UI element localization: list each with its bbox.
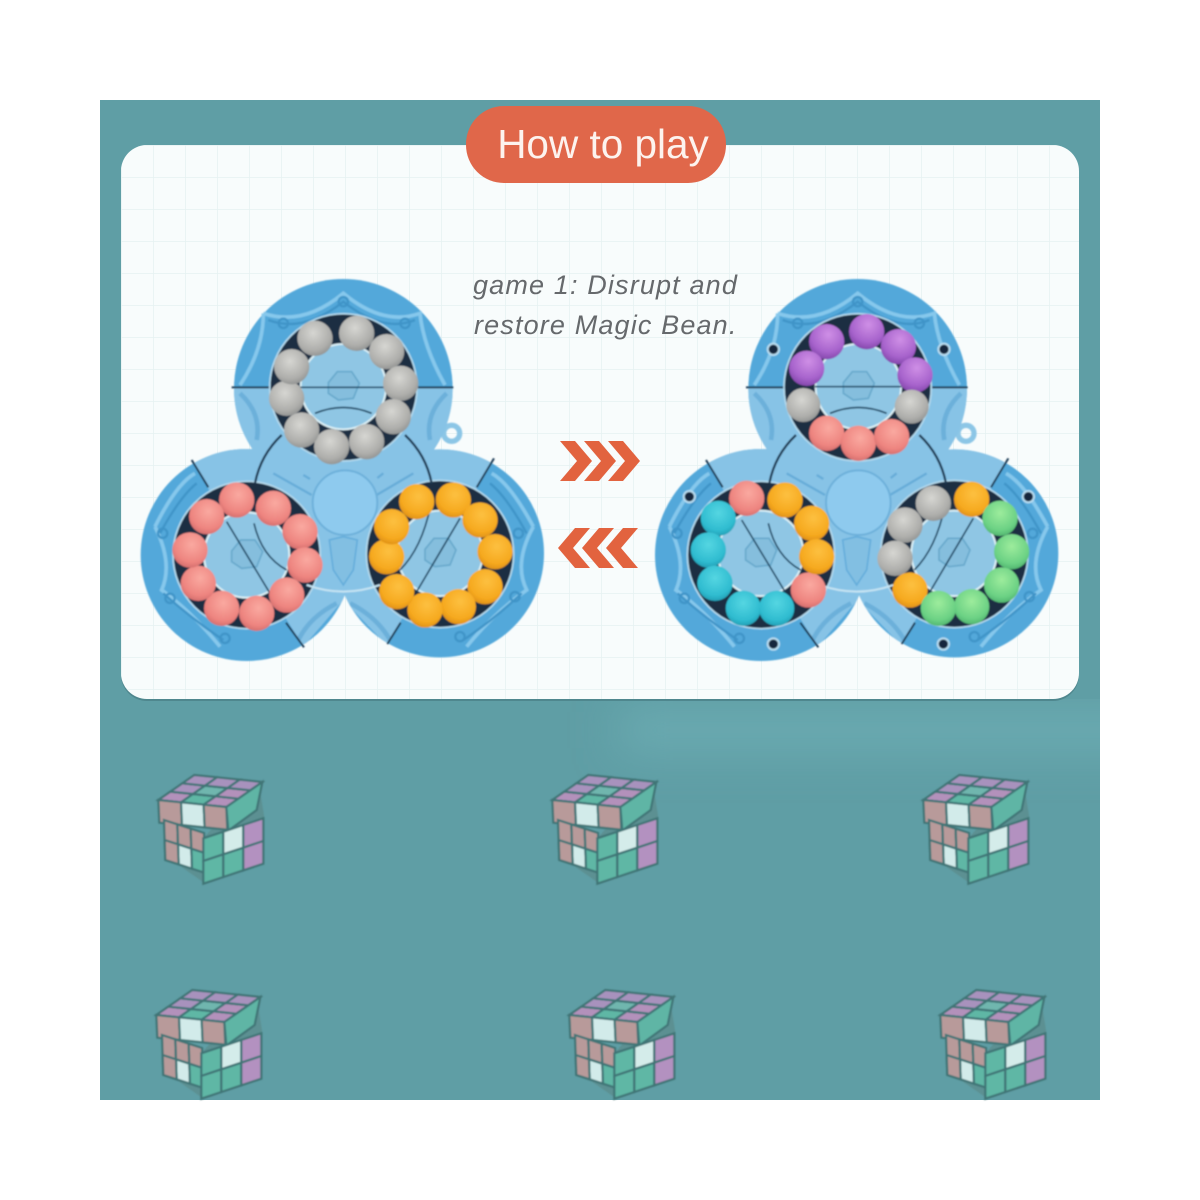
- left toy: sorted beads: [141, 279, 544, 661]
- arrows pointing left: [558, 528, 638, 568]
- how to play badge: [466, 106, 726, 183]
- left toy right disc: [397, 511, 483, 596]
- arrows pointing right: [560, 441, 640, 481]
- purple beads: [789, 314, 933, 393]
- game instruction text: restore Magic Bean.: [474, 310, 737, 340]
- cube top center: [552, 775, 658, 884]
- how to play badge: How to play: [497, 121, 710, 167]
- right toy left disc: [718, 511, 803, 596]
- left toy top disc: [301, 344, 386, 429]
- lighter band: [646, 720, 1100, 740]
- grey beads: [786, 388, 951, 576]
- cube top left: [158, 775, 264, 884]
- game instruction text: [473, 270, 738, 340]
- pink beads: [729, 416, 909, 608]
- white grid board: [121, 145, 1079, 701]
- orange beads: [767, 482, 989, 608]
- background panel: [100, 100, 1100, 1100]
- right toy: scrambled beads: [655, 279, 1058, 661]
- right toy top disc: [816, 344, 901, 429]
- cube bottom right: [940, 990, 1046, 1099]
- orange beads: [369, 482, 513, 628]
- left toy left disc: [204, 512, 289, 598]
- right toy seams: [742, 387, 973, 592]
- cyan beads: [691, 501, 794, 626]
- cube bottom left: [156, 990, 262, 1099]
- cube top right: [923, 775, 1029, 884]
- grey beads: [269, 316, 418, 464]
- game instruction text: game 1: Disrupt and: [473, 270, 738, 300]
- pink beads: [172, 482, 323, 631]
- screw holes: [684, 344, 1034, 650]
- green beads: [921, 501, 1029, 626]
- left toy seams: [227, 387, 460, 593]
- cube bottom center: [569, 990, 675, 1099]
- right toy right disc: [911, 511, 997, 596]
